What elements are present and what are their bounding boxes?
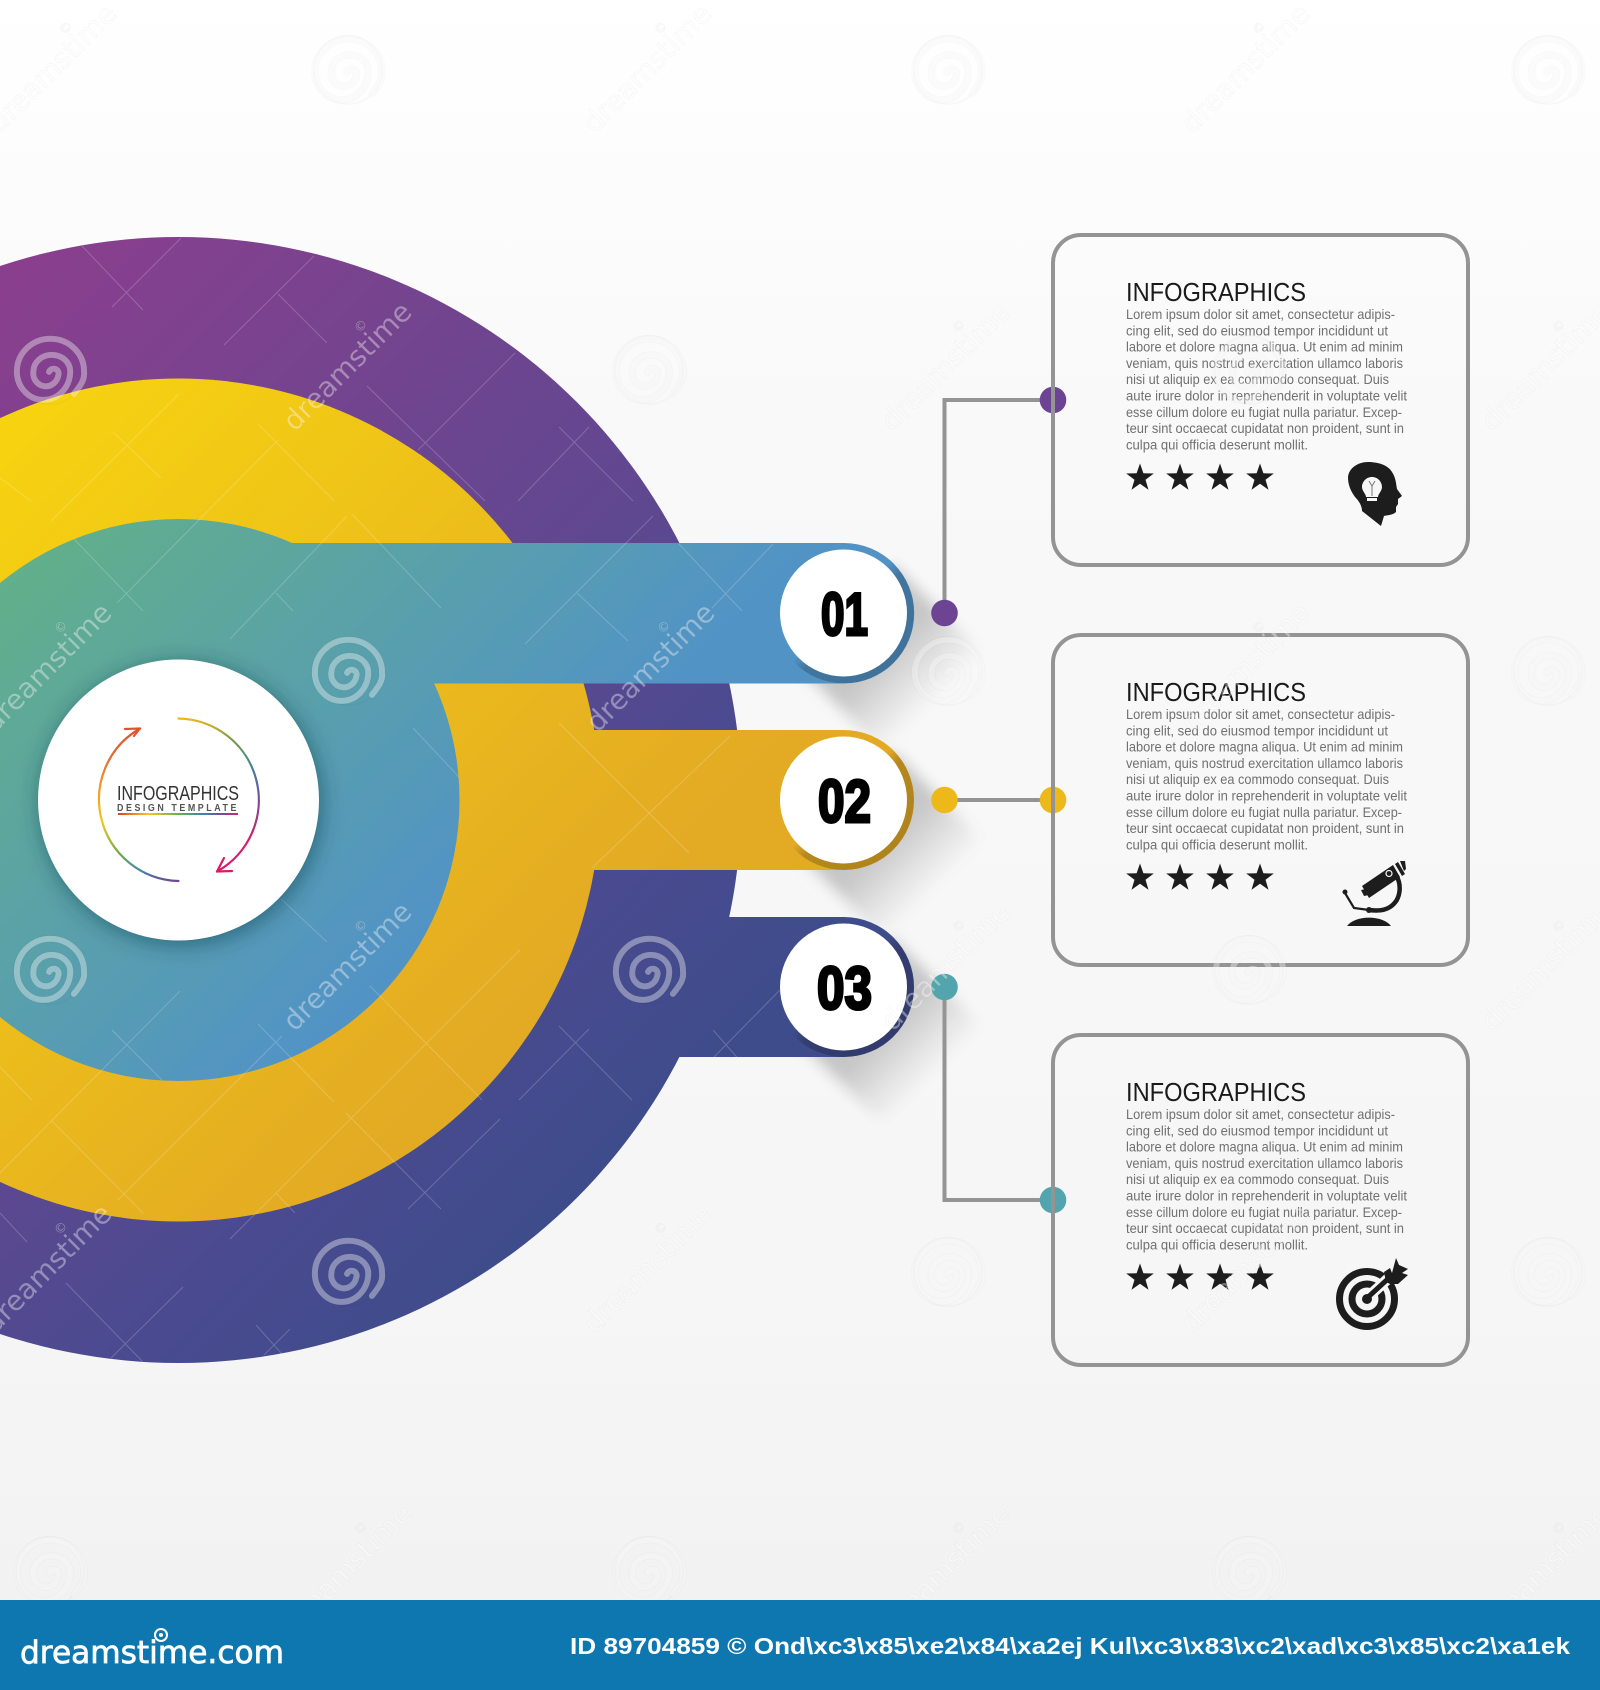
icon: microscope xyxy=(1342,861,1406,926)
watermark text: dreamstime xyxy=(576,1197,718,1339)
concentric circle diagram xyxy=(0,237,914,1363)
card body text: esse cillum dolore eu fugiat nulla pariatur. Excep- xyxy=(1126,405,1402,420)
watermark text: © xyxy=(57,19,76,39)
card body text: veniam, quis nostrud exercitation ullamco laboris xyxy=(1126,756,1403,771)
watermark text: dreamstime xyxy=(576,0,718,139)
center subtitle: DESIGN TEMPLATE xyxy=(117,802,239,814)
card box xyxy=(1053,1035,1468,1365)
card body text: labore et dolore magna aliqua. Ut enim ad minim xyxy=(1126,340,1403,355)
watermark text: © xyxy=(352,1519,371,1539)
card box xyxy=(1053,235,1468,565)
decorative watermark lines over rings xyxy=(0,238,780,1363)
icon: head with light bulb xyxy=(1348,462,1402,526)
footer logo: dreamstime.com xyxy=(20,1635,284,1671)
watermark text: © xyxy=(1250,19,1269,39)
card body text xyxy=(1126,1107,1407,1252)
card body text: teur sint occaecat cupidatat non proident, sunt in xyxy=(1126,1221,1404,1236)
teal ring with bar 01 xyxy=(0,519,914,1081)
watermark text: © xyxy=(52,1219,71,1239)
card box xyxy=(1053,635,1468,965)
card title: INFOGRAPHICS xyxy=(1126,677,1306,707)
card title: INFOGRAPHICS xyxy=(1126,277,1306,307)
outer purple ring with bar 03 xyxy=(0,237,914,1363)
center white circle xyxy=(38,660,319,940)
watermark text: © xyxy=(1550,1519,1569,1539)
yellow ring with bar 02 xyxy=(0,378,914,1222)
card body text: aute irure dolor in reprehenderit in voluptate velit xyxy=(1126,1188,1407,1204)
star rating xyxy=(1126,864,1274,890)
card body text: nisi ut aliquip ex ea commodo consequat. Duis xyxy=(1126,1172,1389,1187)
card body text: veniam, quis nostrud exercitation ullamco laboris xyxy=(1126,1156,1403,1171)
watermark text: © xyxy=(652,1219,671,1239)
card body text: Lorem ipsum dolor sit amet, consectetur adipis- xyxy=(1126,707,1395,722)
card body text: cing elit, sed do eiusmod tempor incididunt ut xyxy=(1126,723,1388,738)
watermark text: © xyxy=(950,1519,969,1539)
watermark text: © xyxy=(655,618,674,638)
left arc arrow xyxy=(99,728,178,881)
footer credit: ID 89704859 © Ond\xc3\x85\xe2\x84\xa2ej Kul\xc3\x83\xc2\xad\xc3\x85\xc2\xa1ek xyxy=(570,1633,1570,1659)
card body text: labore et dolore magna aliqua. Ut enim ad minim xyxy=(1126,1140,1403,1155)
card body text: culpa qui officia deserunt mollit. xyxy=(1126,437,1308,452)
watermark text: © xyxy=(652,19,671,39)
card body text: veniam, quis nostrud exercitation ullamco laboris xyxy=(1126,356,1403,371)
watermark text: dreamstime xyxy=(1174,596,1316,738)
footer bar xyxy=(0,1600,1600,1690)
watermark text: © xyxy=(1250,1219,1269,1239)
watermark text: © xyxy=(950,317,969,337)
watermark text: © xyxy=(1550,317,1569,337)
center title: INFOGRAPHICS xyxy=(117,782,239,805)
card body text: culpa qui officia deserunt mollit. xyxy=(1126,837,1308,852)
watermark text: dreamstime xyxy=(1174,0,1316,139)
card body text: nisi ut aliquip ex ea commodo consequat. Duis xyxy=(1126,772,1389,787)
card body text: teur sint occaecat cupidatat non proident, sunt in xyxy=(1126,421,1404,436)
number badge 02: 02 xyxy=(818,768,871,835)
rainbow underline xyxy=(118,813,238,815)
card body text: esse cillum dolore eu fugiat nulla pariatur. Excep- xyxy=(1126,1205,1402,1220)
card body text: aute irure dolor in reprehenderit in voluptate velit xyxy=(1126,388,1407,404)
watermark text: © xyxy=(950,917,969,937)
card body text: culpa qui officia deserunt mollit. xyxy=(1126,1237,1308,1252)
number badge 03: 03 xyxy=(817,955,872,1022)
watermark text: dreamstime xyxy=(276,1497,418,1639)
star rating xyxy=(1126,464,1274,490)
watermark text: © xyxy=(352,917,371,937)
center circle with cycle arrows xyxy=(38,660,322,945)
icon: target with arrow xyxy=(1340,1258,1408,1326)
card body text: aute irure dolor in reprehenderit in voluptate velit xyxy=(1126,788,1407,804)
watermark text: © xyxy=(1250,618,1269,638)
card body text: Lorem ipsum dolor sit amet, consectetur adipis- xyxy=(1126,307,1395,322)
card 1 xyxy=(1053,235,1468,565)
watermark text: © xyxy=(52,618,71,638)
connector 03 xyxy=(931,974,1066,1213)
card body text: nisi ut aliquip ex ea commodo consequat. Duis xyxy=(1126,372,1389,387)
number badge 03 xyxy=(774,917,914,1057)
card body text: labore et dolore magna aliqua. Ut enim ad minim xyxy=(1126,740,1403,755)
watermark text: dreamstime xyxy=(874,295,1016,437)
connector 02 xyxy=(931,787,1066,813)
watermark text: dreamstime xyxy=(579,596,721,738)
connector 01 xyxy=(931,387,1066,626)
watermark text: dreamstime xyxy=(1174,1197,1316,1339)
card body text: cing elit, sed do eiusmod tempor incididunt ut xyxy=(1126,323,1388,338)
right arc arrow xyxy=(178,718,259,872)
center circle shadow xyxy=(40,663,322,945)
card title: INFOGRAPHICS xyxy=(1126,1077,1306,1107)
card 2 xyxy=(1053,635,1468,965)
watermark text: © xyxy=(352,317,371,337)
number badge 02 xyxy=(774,730,914,870)
watermark text: dreamstime xyxy=(874,895,1016,1037)
watermark text: dreamstime xyxy=(276,295,418,437)
card 3 xyxy=(1053,1035,1468,1365)
star rating xyxy=(1126,1264,1274,1290)
watermark text: dreamstime xyxy=(276,895,418,1037)
card body text: Lorem ipsum dolor sit amet, consectetur adipis- xyxy=(1126,1107,1395,1122)
card body text: cing elit, sed do eiusmod tempor incididunt ut xyxy=(1126,1123,1388,1138)
watermark text: © xyxy=(1550,917,1569,937)
card body text xyxy=(1126,307,1407,452)
watermark text: dreamstime xyxy=(874,1497,1016,1639)
card body text xyxy=(1126,707,1407,852)
number badge 01: 01 xyxy=(821,581,868,648)
card body text: esse cillum dolore eu fugiat nulla pariatur. Excep- xyxy=(1126,805,1402,820)
number badge 01 xyxy=(774,543,914,683)
card body text: teur sint occaecat cupidatat non proident, sunt in xyxy=(1126,821,1404,836)
long shadows behind number caps xyxy=(795,564,993,1137)
